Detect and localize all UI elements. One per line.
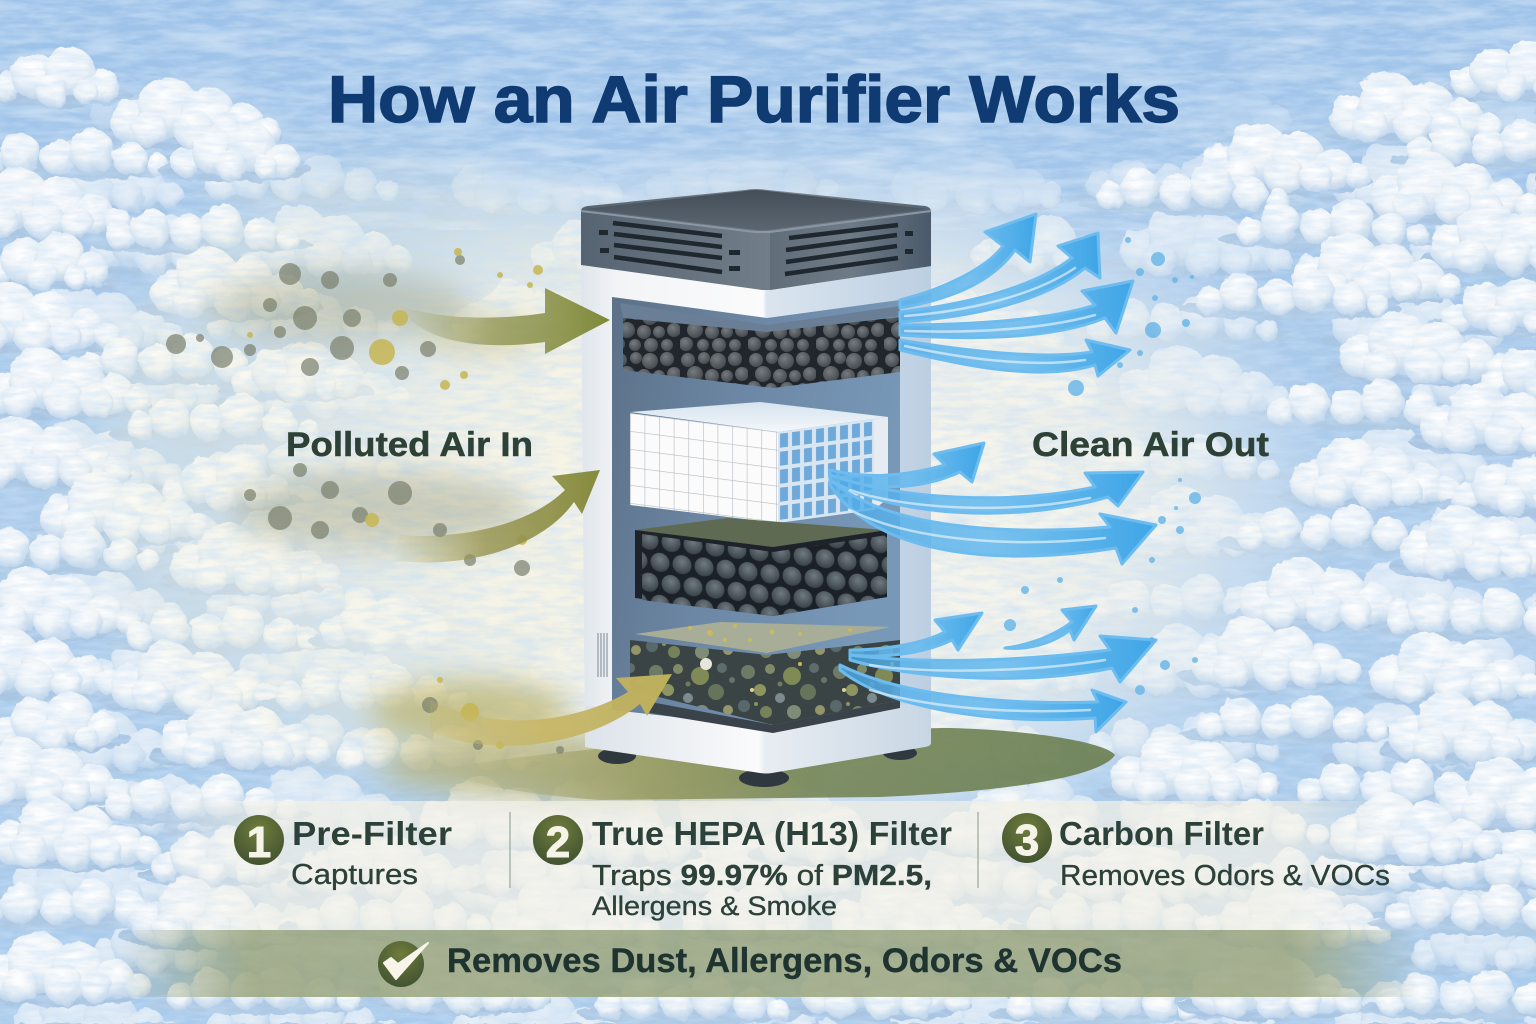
stage 2: HEPA filter: [533, 815, 952, 921]
arrows: clean air out: [830, 214, 1201, 732]
arrows: middle group: [830, 443, 1156, 564]
stage 3: carbon filter: Removes Odors & VOCs: [1060, 860, 1390, 892]
stage 1: pre-filter: [234, 815, 452, 891]
stage 2: HEPA filter: True HEPA (H13) Filter: [592, 815, 952, 852]
filter: HEPA block: [630, 402, 888, 523]
clean air droplets: [1004, 237, 1201, 695]
stage 2: HEPA filter: Allergens & Smoke: [592, 891, 837, 921]
lid vents: [613, 223, 898, 274]
panel: filter stages: [150, 801, 1400, 930]
feet: [598, 746, 917, 787]
arrow: intake middle: [390, 470, 600, 563]
stage 2: HEPA filter: Traps 99.97% of PM2.5,: [592, 860, 932, 892]
stage 3: carbon filter: [1002, 813, 1390, 892]
ground shadow: [380, 728, 1115, 802]
banner: result summary: Removes Dust, Allergens, Odors & VOCs: [447, 942, 1122, 980]
arrow: intake bottom: [430, 674, 672, 746]
arrow: intake top: [400, 288, 610, 354]
arrows: top group: [900, 214, 1133, 376]
arrows: bottom group: [840, 606, 1156, 732]
title: How an Air Purifier Works: [328, 62, 1180, 136]
stage 3: carbon filter: 3: [1015, 816, 1039, 865]
base: [585, 700, 931, 774]
arrows: polluted air in: [390, 288, 672, 746]
inner cavity: [612, 297, 900, 728]
label: polluted air in: Polluted Air In: [286, 426, 533, 464]
filter: foam top: [623, 317, 900, 388]
body shell: [581, 262, 931, 773]
stage 1: pre-filter: 1: [247, 818, 271, 867]
icon: check badge: [378, 941, 428, 987]
haze layer: pale centre: [100, 130, 1340, 870]
stage 3: carbon filter: Carbon Filter: [1059, 815, 1264, 852]
polluted smoke and particles: [166, 248, 570, 754]
label: clean air out: Clean Air Out: [1032, 426, 1269, 464]
stage 2: HEPA filter: 2: [546, 818, 570, 867]
lid: [581, 189, 931, 290]
arrow highlights: [850, 268, 1105, 711]
filter: carbon block: [635, 518, 887, 616]
barcode: [598, 633, 607, 677]
stage 1: pre-filter: Captures: [291, 859, 418, 891]
stage 1: pre-filter: Pre-Filter: [292, 815, 452, 852]
purifier unit: [581, 189, 931, 787]
banner: result summary: [120, 930, 1420, 997]
filter: pre-filter with trapped dust: [630, 622, 900, 733]
